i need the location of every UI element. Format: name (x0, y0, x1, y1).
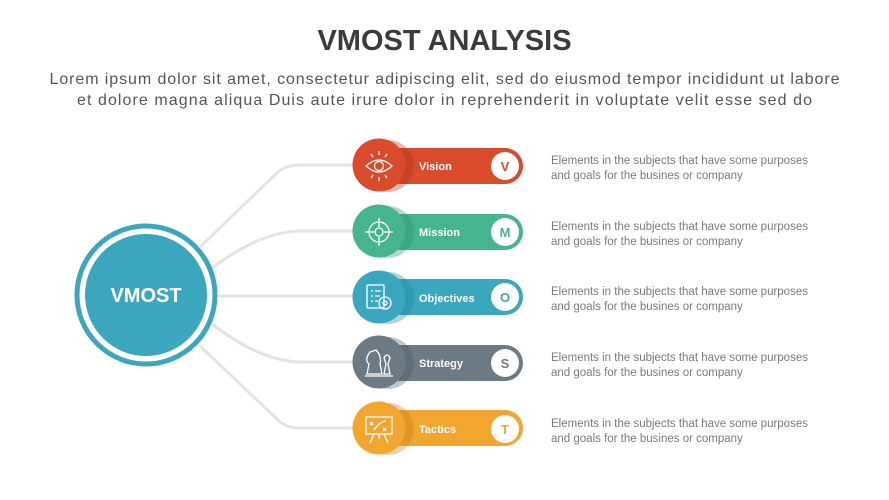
row: Mission: Mission (419, 227, 460, 239)
descriptions (551, 155, 808, 445)
descriptions: and goals for the busines or company (551, 367, 743, 379)
icon: eye (366, 151, 392, 181)
row: Objectives: Objectives (419, 293, 475, 305)
subtitle: et dolore magna aliqua Duis aute irure dolor in reprehenderit in voluptate velit esse sed do (77, 92, 812, 109)
row: Strategy: Strategy (419, 358, 464, 370)
icon: board (366, 417, 392, 443)
connector lines (200, 165, 355, 428)
row: Strategy (352, 336, 523, 389)
descriptions: and goals for the busines or company (551, 236, 743, 248)
central circle: VMOST (77, 226, 215, 364)
descriptions: and goals for the busines or company (551, 301, 743, 313)
row: Vision: Vision (419, 161, 452, 173)
title: VMOST ANALYSIS (317, 25, 572, 57)
row: Tactics: T (501, 422, 509, 437)
row: Tactics: Tactics (419, 424, 456, 436)
row: Mission (352, 204, 523, 258)
row: Mission: M (500, 225, 510, 240)
row: Tactics (352, 402, 523, 455)
central circle: VMOST: VMOST (110, 285, 182, 307)
icon: target (365, 218, 393, 246)
descriptions: and goals for the busines or company (551, 433, 743, 445)
descriptions: Elements in the subjects that have some purposes (551, 155, 808, 167)
row: Vision (352, 138, 523, 192)
descriptions: Elements in the subjects that have some purposes (551, 418, 808, 430)
row: Objectives (352, 270, 523, 324)
descriptions: Elements in the subjects that have some purposes (551, 221, 808, 233)
descriptions: Elements in the subjects that have some purposes (551, 286, 808, 298)
row: Vision: V (501, 159, 510, 174)
descriptions: and goals for the busines or company (551, 170, 743, 182)
descriptions: Elements in the subjects that have some purposes (551, 352, 808, 364)
subtitle (50, 71, 840, 109)
icon: clipboard (367, 285, 391, 309)
icon: chess (365, 350, 393, 376)
row: Objectives: O (500, 290, 510, 305)
subtitle: Lorem ipsum dolor sit amet, consectetur adipiscing elit, sed do eiusmod tempor incididunt ut labore (50, 71, 840, 88)
row: Strategy: S (501, 356, 510, 371)
